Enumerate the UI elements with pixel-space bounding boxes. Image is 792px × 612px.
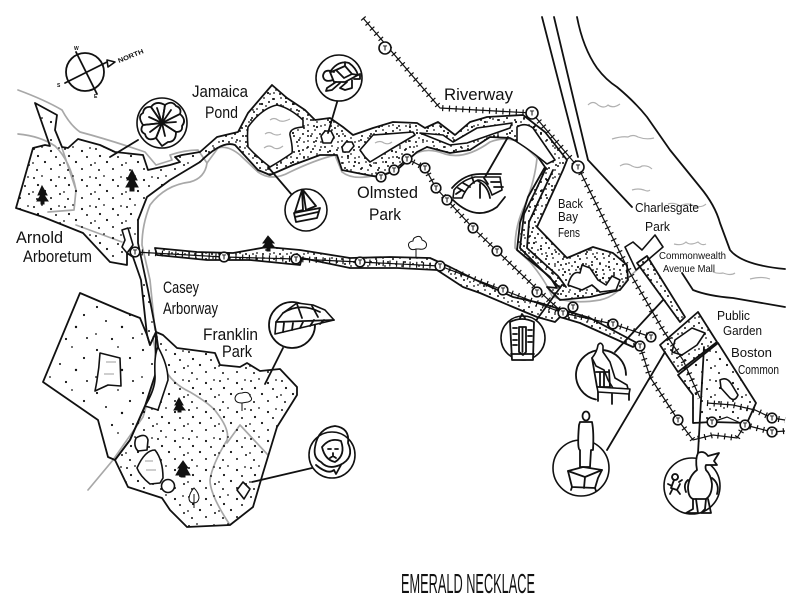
- panel: Franklin Park: [115, 332, 297, 527]
- panel: Charlesgate Park: [625, 235, 663, 270]
- icon: trolley car: [501, 314, 545, 360]
- T station markers: T: [611, 322, 616, 328]
- T station markers: T: [501, 288, 506, 294]
- T station markers: T: [383, 46, 388, 52]
- label: Arnold Arboretum: Arboretum: [23, 247, 92, 266]
- T station markers: T: [638, 344, 643, 350]
- T station markers: T: [405, 156, 410, 164]
- T station markers: T: [743, 422, 748, 430]
- compass: [57, 46, 145, 100]
- icon: standing statue: [553, 412, 609, 496]
- label: Charlesgate Park: Park: [645, 219, 670, 234]
- icon: stone bridge: [452, 174, 505, 213]
- transit line: Green Line E (Riverway): [363, 18, 578, 167]
- label: Public Garden: Garden: [723, 323, 762, 338]
- label: Boston Common: [731, 345, 779, 377]
- water waves: Charles River: [588, 102, 770, 279]
- label: Riverway: Riverway: [444, 85, 513, 104]
- label: Casey Arborway: Casey: [163, 278, 199, 297]
- transit line: downtown loops: [640, 346, 785, 440]
- T station markers: T: [535, 290, 540, 296]
- icon: lion: [309, 426, 355, 478]
- water: Public Garden lagoon: [672, 328, 705, 355]
- gray paths and roads: [18, 90, 650, 525]
- T station markers: [130, 42, 777, 437]
- water waves: Jamaica Pond: [264, 118, 290, 149]
- water: Olmsted Park ponds and Muddy River: [321, 123, 620, 292]
- river: Charles River banks: [542, 17, 785, 307]
- T station markers: T: [770, 430, 775, 436]
- compass: W: [74, 46, 79, 52]
- label: Commonwealth Avenue Mall: Avenue Mall: [663, 264, 715, 275]
- trees on map: [37, 170, 426, 508]
- icon: duck and ducklings: [664, 452, 720, 514]
- T station markers: T: [495, 248, 500, 256]
- T station markers: T: [294, 256, 299, 264]
- T station markers: T: [423, 166, 428, 172]
- T station markers: T: [676, 418, 681, 424]
- label: Back Bay Fens: Fens: [558, 225, 580, 240]
- transit line: Green Line D: [381, 159, 563, 313]
- T station markers: T: [438, 264, 443, 270]
- text: EMERALD NECKLACE: [401, 568, 535, 599]
- label: Commonwealth Avenue Mall: Commonwealth: [659, 251, 726, 262]
- label: Public Garden: [717, 308, 762, 338]
- water: Jamaica Pond: [248, 105, 303, 167]
- transit line: Green Line to Downtown: [578, 167, 700, 398]
- T station markers: T: [710, 420, 715, 426]
- T station markers: T: [379, 174, 384, 182]
- label: Boston Common: Common: [738, 362, 779, 377]
- label: Casey Arborway: Arborway: [163, 299, 218, 318]
- T station markers: T: [133, 250, 138, 256]
- panel: Boston Common: [678, 343, 756, 423]
- label: Public Garden: Public: [717, 308, 750, 323]
- panel: Arnold Arboretum, Jamaica Pond, Olmsted Park, Riverway and Fens: [16, 85, 628, 345]
- T station markers: T: [471, 226, 476, 232]
- label: Franklin Park: [203, 325, 258, 361]
- label: Back Bay Fens: Back: [558, 196, 583, 211]
- T station markers: T: [649, 334, 654, 342]
- panel: Public Garden: [660, 312, 717, 372]
- label: Casey Arborway: [163, 278, 218, 318]
- T station markers: T: [445, 198, 450, 204]
- label: Charlesgate Park: [635, 200, 699, 234]
- T station markers: T: [571, 304, 576, 312]
- T station markers: T: [561, 310, 566, 318]
- icon: turtle: [316, 55, 362, 101]
- compass: NORTH: [117, 48, 145, 65]
- icon: Franklin Park playstead: [269, 302, 334, 348]
- T station markers: T: [530, 110, 535, 118]
- denser stipple along corridor: [200, 85, 628, 300]
- icon: seated statue: [576, 343, 630, 404]
- water: Frog Pond: [720, 379, 738, 399]
- label: Jamaica Pond: [192, 82, 248, 122]
- leader lines to icon circles: [110, 99, 704, 482]
- Arnold Arboretum lobe at Forest Hills: [122, 228, 133, 253]
- panel: Southwest Corridor park: [155, 247, 637, 347]
- label: Arnold Arboretum: [16, 228, 92, 266]
- label: Back Bay Fens: [558, 196, 583, 240]
- compass: E: [94, 94, 98, 100]
- label: Olmsted Park: Olmsted: [357, 183, 418, 202]
- panel: Franklin Park west: [43, 293, 160, 460]
- label: Boston Common: Boston: [731, 345, 772, 360]
- label: Olmsted Park: [357, 183, 418, 224]
- label: Olmsted Park: Park: [369, 205, 401, 224]
- label: Jamaica Pond: Jamaica: [192, 82, 248, 101]
- T station markers: T: [576, 164, 581, 172]
- icon: flower: [137, 98, 187, 148]
- transit line: Orange Line corridor: [135, 252, 651, 337]
- T station markers: T: [770, 416, 775, 422]
- T station markers: T: [392, 168, 397, 174]
- label: Franklin Park: Park: [222, 342, 252, 361]
- icon: sailboat: [285, 189, 327, 231]
- water: Franklin Park ponds: [95, 347, 250, 499]
- label: Arnold Arboretum: Arnold: [16, 228, 63, 247]
- label: Back Bay Fens: Bay: [558, 209, 578, 224]
- label: Franklin Park: Franklin: [203, 325, 258, 344]
- label: Commonwealth Avenue Mall: [659, 251, 726, 275]
- label: Jamaica Pond: Pond: [205, 103, 238, 122]
- T station markers: T: [434, 186, 439, 192]
- T station markers: T: [222, 254, 227, 262]
- label: Charlesgate Park: Charlesgate: [635, 200, 699, 215]
- T station markers: T: [358, 260, 363, 266]
- panel: Commonwealth Avenue Mall: [637, 256, 685, 322]
- compass: S: [57, 83, 61, 89]
